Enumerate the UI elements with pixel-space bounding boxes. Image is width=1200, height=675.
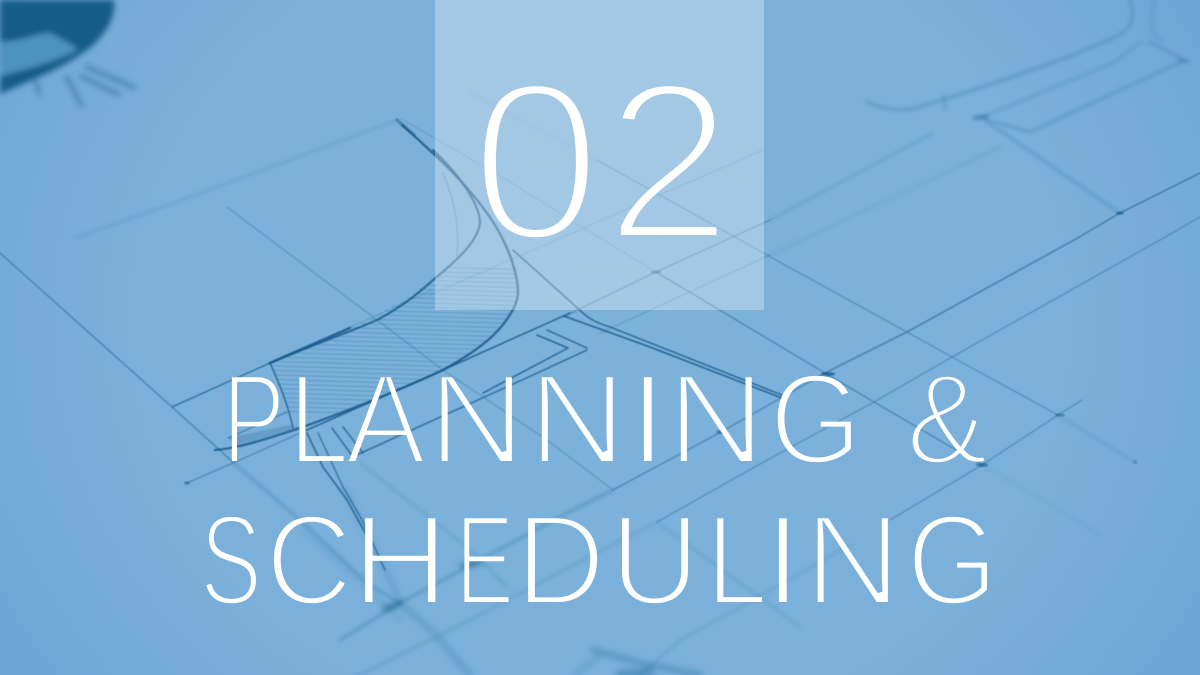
long double lines to the right [513,250,782,395]
background: top right blurred drawing [867,0,1188,213]
faint inner curve [443,173,458,257]
strip rectangle [307,313,570,430]
panel: translucent number block [435,0,764,310]
heading line 1: PLANNING &: I [628,348,668,492]
main inner curve [270,150,480,363]
heading line 1: PLANNING &: & [906,348,988,492]
heading line 2: SCHEDULING [206,516,987,604]
heading line 2: SCHEDULING: L [706,488,768,632]
heading line 1: PLANNING &: N [528,348,626,492]
heading line 2: SCHEDULING: D [516,488,606,632]
hatching lines [272,267,516,414]
heading line 1: PLANNING &: G [770,348,862,492]
heading line 1: PLANNING &: A [345,348,426,492]
heading line 1: PLANNING &: N [667,348,766,492]
number: 02 [484,86,716,238]
background: grid intersection marks [184,211,1137,485]
heading line 2: SCHEDULING: I [763,488,803,632]
heading line 1: PLANNING &: N [428,348,526,492]
number: 02: 2 [605,34,732,288]
fan lines beneath the L [307,433,372,545]
heading line 2: SCHEDULING: N [804,488,902,632]
heading line 1: PLANNING &: P [222,348,285,492]
heading line 2: SCHEDULING: E [456,488,514,632]
heading line 2: SCHEDULING: G [906,488,998,632]
heading line 1: PLANNING &: L [288,348,349,492]
heading line 2: SCHEDULING: C [266,488,352,632]
icon: blurred object top left corner [0,0,135,106]
background: sharp grid lines [0,118,1200,522]
background: far blurred lines bottom [303,490,700,675]
number: 02: 0 [470,34,602,288]
heading line 2: SCHEDULING: U [610,488,700,632]
heading line 1: PLANNING & [232,376,984,462]
background: blurred grid lines far from focus [75,93,1135,675]
lower wedge [228,412,287,438]
illustration: architectural sketch curves [215,120,782,570]
heading line 2: SCHEDULING: H [352,488,449,632]
left edge of hatched shape [270,363,293,428]
main outer curve [215,125,518,450]
heading line 2: SCHEDULING: S [200,488,262,632]
